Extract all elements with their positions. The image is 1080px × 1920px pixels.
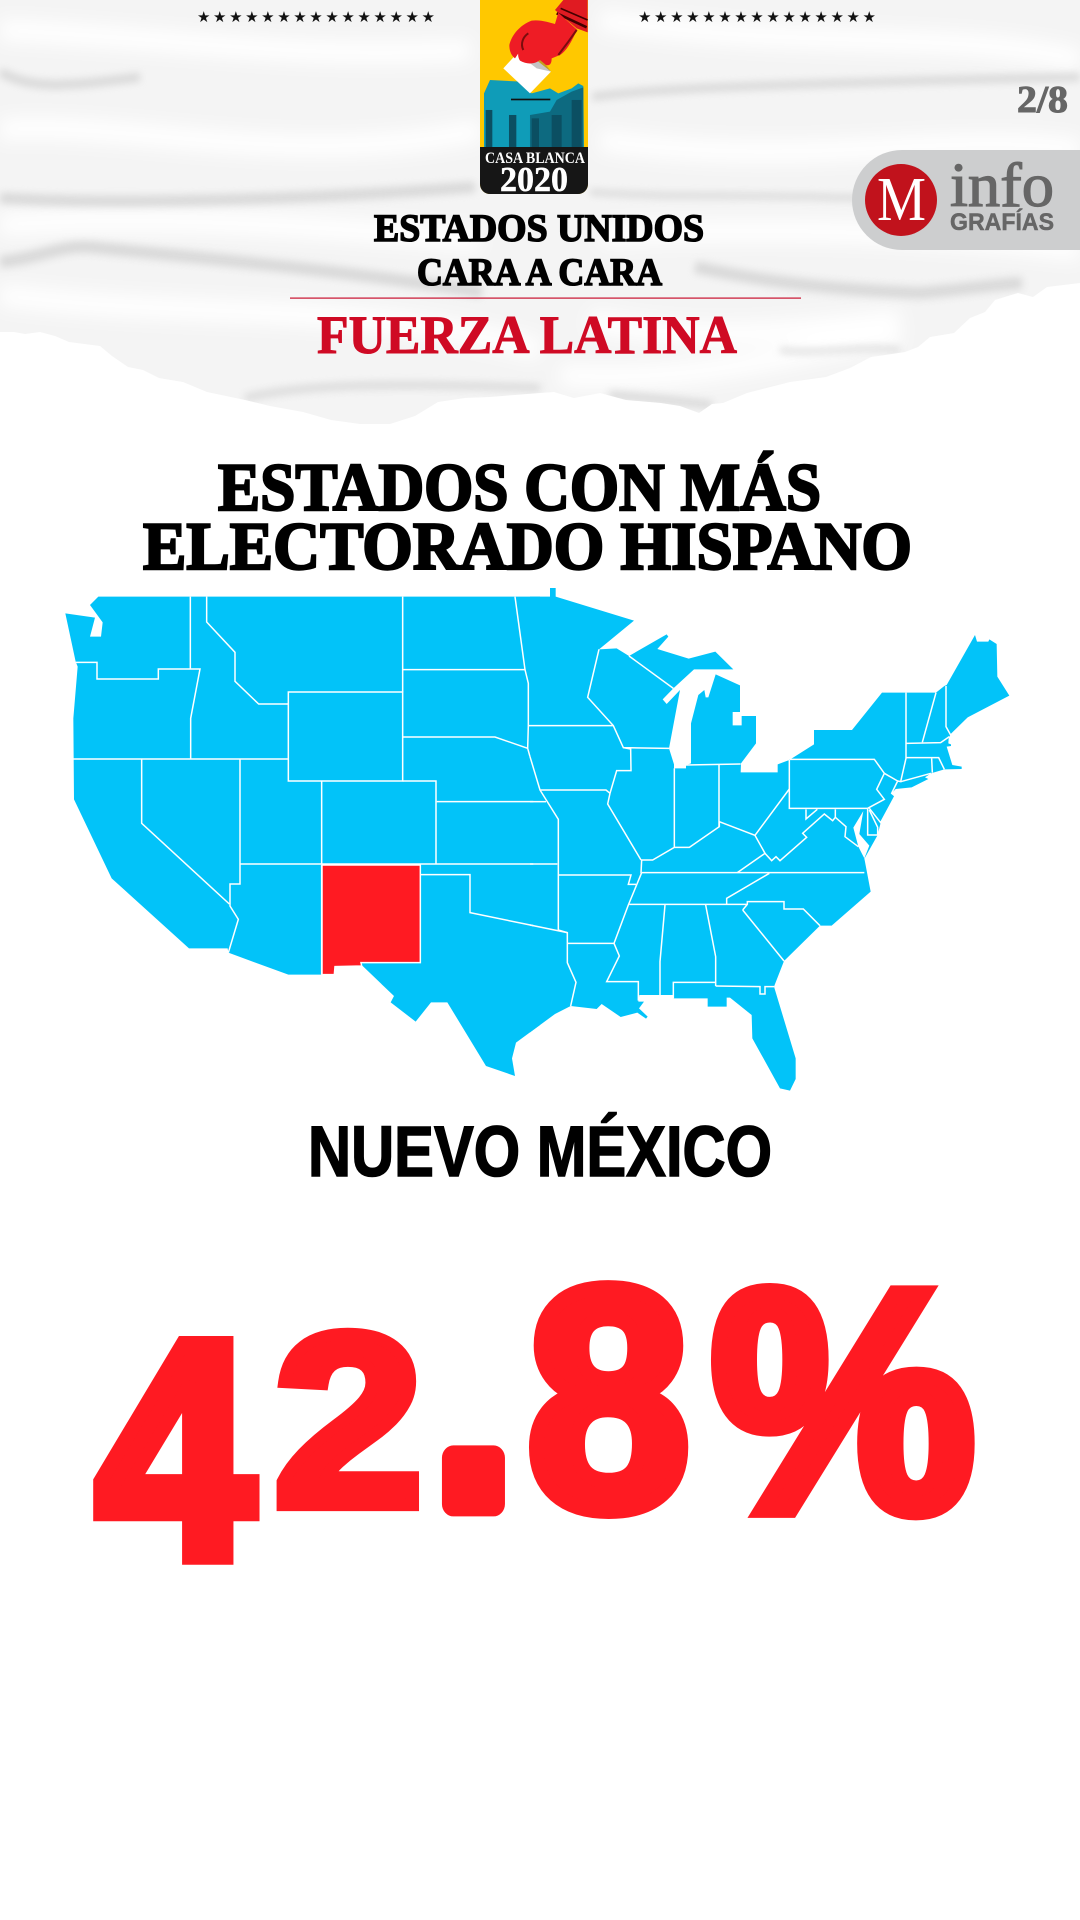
state name: NUEVO MÉXICO xyxy=(308,1113,772,1192)
logo grey pill xyxy=(852,150,1080,250)
logo black band xyxy=(480,147,588,194)
big percentage xyxy=(96,1224,975,1623)
logo: Milenio infografías xyxy=(852,150,1080,250)
icon: red hand xyxy=(509,0,588,65)
logo yellow panel xyxy=(480,0,588,194)
stars right: ★★★★★★★★★★★★★★★ xyxy=(638,8,876,26)
map east borders xyxy=(528,649,951,1006)
icon: ballot column map xyxy=(484,48,584,148)
map: United States xyxy=(65,588,1009,1091)
page number: 2/8 xyxy=(1017,79,1068,121)
background: crumpled torn paper xyxy=(0,0,1080,430)
stars left: ★★★★★★★★★★★★★★★ xyxy=(197,8,435,26)
map fills xyxy=(65,588,1009,1091)
big percentage: % xyxy=(711,1225,975,1577)
subtitle: FUERZA LATINA xyxy=(317,305,737,365)
map west borders xyxy=(73,597,533,975)
M letter: M xyxy=(877,166,926,234)
big percentage: 2 xyxy=(274,1285,423,1557)
logo text: CASA BLANCA xyxy=(485,150,585,167)
big percentage: . xyxy=(434,1224,513,1571)
state: New Mexico highlighted xyxy=(322,865,420,975)
title line 2: CARA A CARA xyxy=(417,251,662,294)
red divider xyxy=(290,298,801,299)
info word: info xyxy=(950,152,1054,220)
logo year: 2020 xyxy=(500,160,568,199)
big percentage: 4 xyxy=(96,1276,256,1623)
icon: M circle xyxy=(865,164,937,236)
grafias word: GRAFÍAS xyxy=(950,208,1054,236)
title line 1: ESTADOS UNIDOS xyxy=(374,207,704,250)
heading line 2: ELECTORADO HISPANO xyxy=(143,508,912,584)
Chesapeake Bay xyxy=(853,811,869,858)
logo: Casa Blanca 2020 xyxy=(480,0,588,199)
heading line 1: ESTADOS CON MÁS xyxy=(218,449,821,525)
big percentage: 8 xyxy=(527,1224,690,1575)
